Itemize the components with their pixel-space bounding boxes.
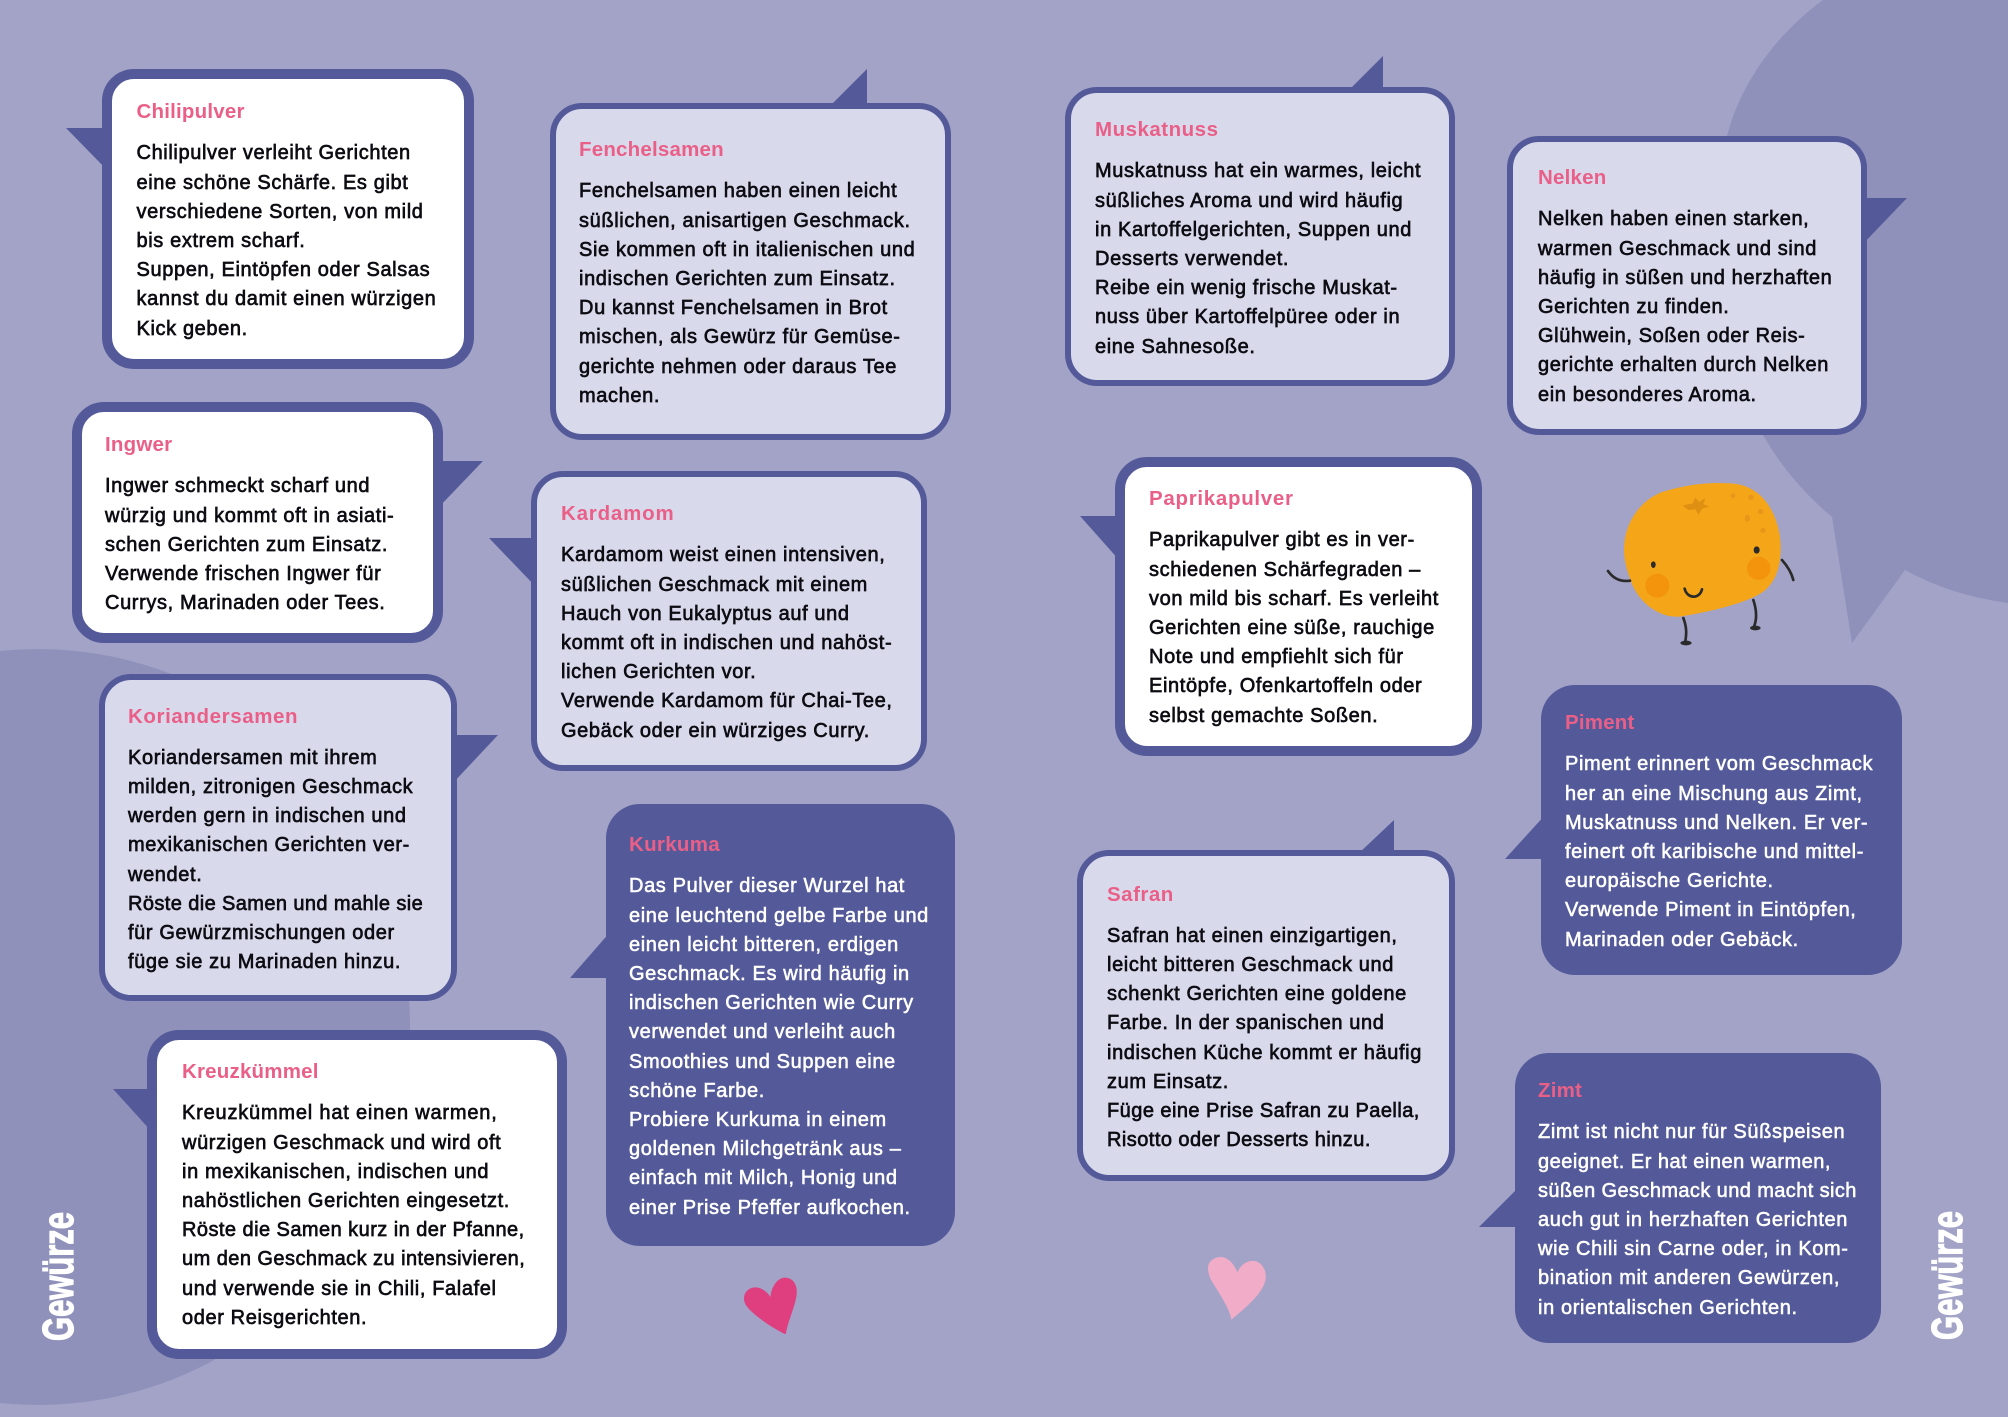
panel: Chilipulver: verschiedene Sorten, von mild: [136, 201, 424, 223]
panel: Zimt: in orientalischen Gerichten.: [1538, 1297, 1798, 1319]
panel: Kurkuma: einen leicht bitteren, erdigen: [629, 934, 899, 956]
panel: Muskatnuss: nuss über Kartoffelpüree oder in: [1095, 306, 1400, 328]
panel: Safran: Füge eine Prise Safran zu Paella,: [1107, 1100, 1420, 1122]
panel: Paprikapulver: [1080, 457, 1482, 756]
panel: Safran: Farbe. In der spanischen und: [1107, 1012, 1385, 1034]
icon: orange character: [1606, 483, 1795, 646]
panel: Chilipulver: Kick geben.: [136, 318, 248, 340]
panel: Chilipulver: kannst du damit einen würzigen: [136, 288, 436, 310]
panel: Zimt: [1479, 1053, 1881, 1343]
panel: Zimt: Zimt ist nicht nur für Süßspeisen: [1538, 1121, 1845, 1143]
panel: Kreuzkümmel: Kreuzkümmel hat einen warmen,: [182, 1102, 498, 1124]
panel: Kreuzkümmel: Röste die Samen kurz in der Pfanne,: [182, 1219, 525, 1241]
panel: Kurkuma: [570, 804, 955, 1246]
panel: Paprikapulver: von mild bis scharf. Es verleiht: [1149, 588, 1439, 610]
panel: Kardamom: kommt oft in indischen und nahöst-: [561, 632, 892, 654]
panel: Kardamom: lichen Gerichten vor.: [561, 661, 756, 683]
panel: Kurkuma: verwendet und verleiht auch: [629, 1021, 896, 1043]
panel: Koriandersamen: für Gewürzmischungen oder: [128, 922, 395, 944]
panel: Kreuzkümmel: [113, 1030, 567, 1359]
panel: Muskatnuss: Muskatnuss: [1095, 118, 1218, 141]
panel: Fenchelsamen: [550, 69, 951, 440]
panel: Kreuzkümmel: um den Geschmack zu intensivieren,: [182, 1248, 525, 1270]
panel: Safran: Safran hat einen einzigartigen,: [1107, 925, 1398, 947]
panel: Kreuzkümmel: Kreuzkümmel: [182, 1060, 319, 1083]
panel: Safran: Safran: [1107, 883, 1174, 906]
panel: Nelken: warmen Geschmack und sind: [1538, 238, 1817, 260]
panel: Muskatnuss: eine Sahnesoße.: [1095, 336, 1256, 358]
panel: Kurkuma: Smoothies und Suppen eine: [629, 1051, 896, 1073]
panel: Koriandersamen: Röste die Samen und mahle sie: [128, 893, 423, 915]
icon: dark pink heart: [744, 1278, 797, 1334]
panel: Fenchelsamen: Du kannst Fenchelsamen in Brot: [579, 297, 888, 319]
panel: Paprikapulver: schiedenen Schärfegraden –: [1149, 559, 1421, 581]
panel: Ingwer: Ingwer schmeckt scharf und: [105, 475, 370, 497]
panel: Zimt: Zimt: [1538, 1079, 1582, 1102]
panel: Muskatnuss: süßliches Aroma und wird häufig: [1095, 190, 1403, 212]
panel: Piment: feinert oft karibische und mittel-: [1565, 841, 1864, 863]
panel: Muskatnuss: [1065, 56, 1455, 386]
panel: Safran: schenkt Gerichten eine goldene: [1107, 983, 1407, 1005]
panel: Zimt: auch gut in herzhaften Gerichten: [1538, 1209, 1848, 1231]
panel: Kurkuma: Probiere Kurkuma in einem: [629, 1109, 887, 1131]
panel: Ingwer: Currys, Marinaden oder Tees.: [105, 592, 385, 614]
panel: Kurkuma: schöne Farbe.: [629, 1080, 765, 1102]
panel: Chilipulver: bis extrem scharf.: [136, 230, 305, 252]
panel: Kreuzkümmel: würzigen Geschmack und wird oft: [182, 1132, 501, 1154]
panel: Chilipulver: Chilipulver: [136, 100, 245, 123]
panel: Paprikapulver: Paprikapulver gibt es in ver-: [1149, 529, 1415, 551]
panel: Kurkuma: indischen Gerichten wie Curry: [629, 992, 914, 1014]
panel: Ingwer: [72, 402, 483, 643]
panel: Muskatnuss: in Kartoffelgerichten, Suppen und: [1095, 219, 1412, 241]
panel: Kreuzkümmel: in mexikanischen, indischen und: [182, 1161, 489, 1183]
panel: Kardamom: Kardamom: [561, 502, 674, 525]
panel: Kardamom: Kardamom weist einen intensiven,: [561, 544, 885, 566]
panel: Kurkuma: einfach mit Milch, Honig und: [629, 1167, 898, 1189]
panel: Chilipulver: Suppen, Eintöpfen oder Salsas: [136, 259, 430, 281]
panel: Kardamom: süßlichen Geschmack mit einem: [561, 574, 868, 596]
panel: Piment: Muskatnuss und Nelken. Er ver-: [1565, 812, 1868, 834]
panel: Zimt: wie Chili sin Carne oder, in Kom-: [1538, 1238, 1849, 1260]
panel: Piment: europäische Gerichte.: [1565, 870, 1774, 892]
panel: Paprikapulver: Gerichten eine süße, rauchige: [1149, 617, 1435, 639]
panel: Paprikapulver: Paprikapulver: [1149, 487, 1294, 510]
panel: Chilipulver: [66, 69, 474, 369]
panel: Kurkuma: goldenen Milchgetränk aus –: [629, 1138, 901, 1160]
panel: Paprikapulver: Note und empfiehlt sich für: [1149, 646, 1404, 668]
panel: Fenchelsamen: indischen Gerichten zum Einsatz.: [579, 268, 896, 290]
panel: Fenchelsamen: mischen, als Gewürz für Gemüse-: [579, 326, 901, 348]
panel: Nelken: Glühwein, Soßen oder Reis-: [1538, 325, 1805, 347]
panel: Safran: indischen Küche kommt er häufig: [1107, 1042, 1422, 1064]
panel: Ingwer: schen Gerichten zum Einsatz.: [105, 534, 388, 556]
panel: Kardamom: [489, 471, 927, 771]
panel: Fenchelsamen: gerichte nehmen oder daraus Tee: [579, 356, 897, 378]
panel: Piment: Marinaden oder Gebäck.: [1565, 929, 1799, 951]
panel: Kreuzkümmel: nahöstlichen Gerichten eingesetzt.: [182, 1190, 510, 1212]
panel: Muskatnuss: Muskatnuss hat ein warmes, leicht: [1095, 160, 1421, 182]
panel: Nelken: ein besonderes Aroma.: [1538, 384, 1757, 406]
panel: Kurkuma: Geschmack. Es wird häufig in: [629, 963, 910, 985]
panel: Piment: Piment: [1565, 711, 1635, 734]
panel: Kurkuma: Kurkuma: [629, 833, 720, 856]
panel: Safran: Risotto oder Desserts hinzu.: [1107, 1129, 1371, 1151]
panel: Chilipulver: Chilipulver verleiht Gerichten: [136, 142, 411, 164]
panel: Ingwer: Verwende frischen Ingwer für: [105, 563, 381, 585]
panel: Fenchelsamen: Sie kommen oft in italienischen und: [579, 239, 915, 261]
panel: Kreuzkümmel: und verwende sie in Chili, Falafel: [182, 1278, 497, 1300]
panel: Piment: Verwende Piment in Eintöpfen,: [1565, 899, 1856, 921]
panel: Ingwer: Ingwer: [105, 433, 172, 456]
panel: Nelken: Nelken: [1538, 166, 1606, 189]
panel: Zimt: süßen Geschmack und macht sich: [1538, 1180, 1857, 1202]
panel: Ingwer: würzig und kommt oft in asiati-: [105, 505, 394, 527]
panel: Muskatnuss: Reibe ein wenig frische Muskat-: [1095, 277, 1398, 299]
panel: Koriandersamen: Koriandersamen mit ihrem: [128, 747, 377, 769]
panel: Zimt: bination mit anderen Gewürzen,: [1538, 1267, 1840, 1289]
panel: Fenchelsamen: Fenchelsamen: [579, 138, 724, 161]
icon: light pink heart: [1208, 1257, 1266, 1320]
panel: Koriandersamen: milden, zitronigen Geschmack: [128, 776, 413, 798]
panel: Nelken: Nelken haben einen starken,: [1538, 208, 1809, 230]
panel: Nelken: Gerichten zu finden.: [1538, 296, 1729, 318]
panel: Nelken: gerichte erhalten durch Nelken: [1538, 354, 1829, 376]
panel: Kardamom: Gebäck oder ein würziges Curry.: [561, 720, 870, 742]
panel: Fenchelsamen: Fenchelsamen haben einen leicht: [579, 180, 897, 202]
panel: Piment: [1505, 685, 1902, 975]
panel: Piment: her an eine Mischung aus Zimt,: [1565, 783, 1863, 805]
panel: Koriandersamen: füge sie zu Marinaden hinzu.: [128, 951, 401, 973]
panel: Koriandersamen: wendet.: [128, 864, 202, 886]
panel: Paprikapulver: selbst gemachte Soßen.: [1149, 705, 1378, 727]
panel: Koriandersamen: werden gern in indischen und: [128, 805, 407, 827]
panel: Safran: leicht bitteren Geschmack und: [1107, 954, 1394, 976]
panel: Safran: [1077, 820, 1455, 1181]
panel: Fenchelsamen: machen.: [579, 385, 660, 407]
panel: Koriandersamen: [99, 674, 498, 1001]
panel: Kurkuma: einer Prise Pfeffer aufkochen.: [629, 1197, 911, 1219]
panel: Koriandersamen: mexikanischen Gerichten ver-: [128, 834, 410, 856]
panel: Chilipulver: eine schöne Schärfe. Es gibt: [136, 172, 408, 194]
panel: Kurkuma: Das Pulver dieser Wurzel hat: [629, 875, 905, 897]
panel: Nelken: häufig in süßen und herzhaften: [1538, 267, 1832, 289]
panel: Kardamom: Hauch von Eukalyptus auf und: [561, 603, 850, 625]
panel: Safran: zum Einsatz.: [1107, 1071, 1229, 1093]
panel: Kreuzkümmel: oder Reisgerichten.: [182, 1307, 367, 1329]
panel: Kurkuma: eine leuchtend gelbe Farbe und: [629, 905, 929, 927]
panel: Muskatnuss: Desserts verwendet.: [1095, 248, 1289, 270]
panel: Kardamom: Verwende Kardamom für Chai-Tee,: [561, 690, 893, 712]
panel: Paprikapulver: Eintöpfe, Ofenkartoffeln oder: [1149, 675, 1422, 697]
panel: Fenchelsamen: süßlichen, anisartigen Geschmack.: [579, 210, 911, 232]
panel: Piment: Piment erinnert vom Geschmack: [1565, 753, 1873, 775]
panel: Koriandersamen: Koriandersamen: [128, 705, 298, 728]
panel: Zimt: geeignet. Er hat einen warmen,: [1538, 1151, 1831, 1173]
panel: Nelken: [1507, 136, 1907, 435]
